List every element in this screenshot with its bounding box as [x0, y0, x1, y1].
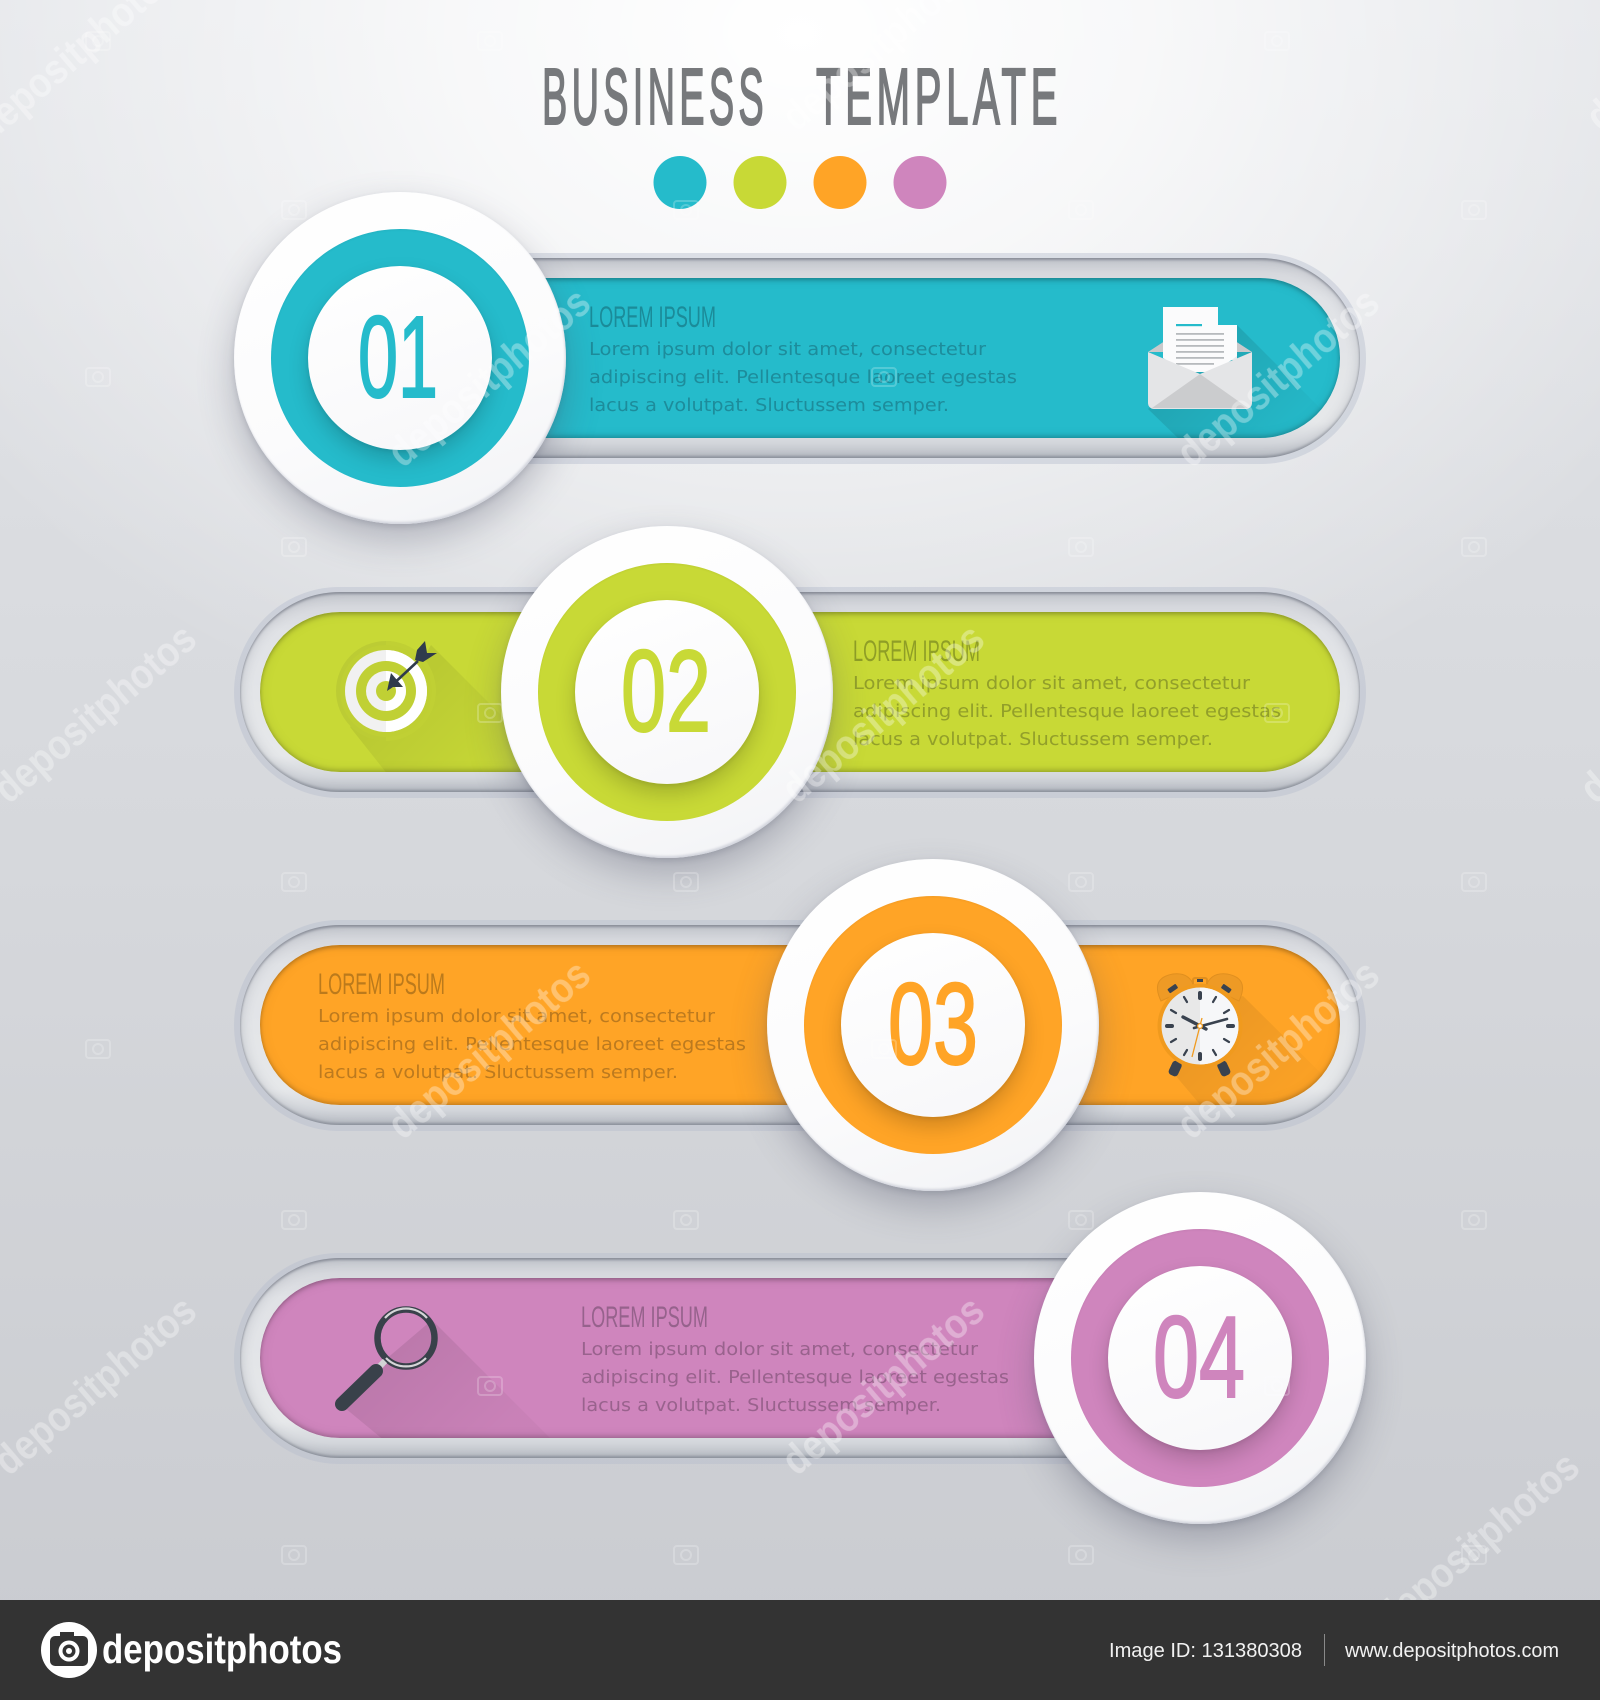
text block 03: lacus a volutpat. Sluctussem semper.: [318, 1062, 678, 1083]
text block 02: Lorem ipsum dolor sit amet, consectetur: [853, 673, 1251, 694]
text block 01: Lorem ipsum dolor sit amet, consectetur: [589, 339, 987, 360]
text block 03: LOREM IPSUM: [318, 968, 445, 1001]
watermark layer: depositphotos: [378, 278, 599, 476]
panel: step 02: [234, 524, 1366, 890]
text block 04: [581, 1301, 1009, 1416]
number 02: 02: [621, 626, 711, 756]
panel: step 04: [234, 1190, 1382, 1556]
text block 01: LOREM IPSUM: [589, 301, 716, 334]
text block 02: lacus a volutpat. Sluctussem semper.: [853, 729, 1213, 750]
groove 02: [234, 587, 1366, 798]
text block 03: [318, 968, 746, 1083]
footer logo: depositphotos: [102, 1626, 342, 1672]
groove 03: [234, 920, 1366, 1131]
footer logo: [41, 1622, 342, 1678]
watermark layer: depositphotos: [772, 1286, 993, 1484]
text block 03: Lorem ipsum dolor sit amet, consectetur: [318, 1006, 716, 1027]
coloured bar 03: [260, 945, 1340, 1105]
colour dots: [654, 156, 946, 209]
ring 02: [538, 563, 796, 821]
ring 01: [271, 229, 529, 487]
number 01: 01: [358, 292, 438, 422]
coloured bar 02: [260, 612, 1340, 772]
number 04: [1108, 1266, 1292, 1450]
text block 04: Lorem ipsum dolor sit amet, consectetur: [581, 1339, 979, 1360]
groove 01: [234, 253, 1366, 464]
number circle 03: [767, 859, 1099, 1191]
ring 04: [1071, 1229, 1329, 1487]
text block 01: [589, 301, 1017, 416]
text block 01: adipiscing elit. Pellentesque laoreet egestas: [589, 367, 1017, 388]
watermark layer: depositphotos: [378, 950, 599, 1148]
number circle 04: [1034, 1192, 1366, 1524]
watermark layer: depositphotos: [772, 614, 993, 812]
text block 02: [853, 635, 1281, 750]
number circle 02: [501, 526, 833, 858]
number circle 01: [234, 192, 566, 524]
icon: envelope: [1148, 307, 1294, 438]
text block 02: adipiscing elit. Pellentesque laoreet egestas: [853, 701, 1281, 722]
ring 03: [804, 896, 1062, 1154]
number 01: [308, 266, 492, 450]
panel: step 01: [217, 190, 1366, 557]
watermark layer: depositphotos: [1167, 278, 1388, 476]
footer image id and url: Image ID: 131380308: [1109, 1640, 1302, 1662]
icon: magnifying glass: [335, 1306, 504, 1438]
title: BUSINESS: [542, 52, 768, 141]
text block 04: lacus a volutpat. Sluctussem semper.: [581, 1395, 941, 1416]
number 04: 04: [1153, 1292, 1245, 1422]
footer image id and url: [1109, 1634, 1559, 1666]
number 03: 03: [888, 959, 978, 1089]
title: TEMPLATE: [816, 52, 1062, 141]
groove 04: [234, 1253, 1366, 1464]
icon: alarm clock: [1157, 973, 1295, 1105]
panel: step 03: [234, 857, 1366, 1223]
number 02: [575, 600, 759, 784]
text block 01: lacus a volutpat. Sluctussem semper.: [589, 395, 949, 416]
coloured bar 01: [260, 278, 1340, 438]
icon: target with arrow: [336, 641, 482, 772]
footer bar: [0, 1600, 1600, 1700]
text block 03: adipiscing elit. Pellentesque laoreet egestas: [318, 1034, 746, 1055]
text block 04: adipiscing elit. Pellentesque laoreet egestas: [581, 1367, 1009, 1388]
text block 02: LOREM IPSUM: [853, 635, 980, 668]
watermark layer: depositphotos: [1167, 950, 1388, 1148]
coloured bar 04: [260, 1278, 1340, 1438]
text block 04: LOREM IPSUM: [581, 1301, 708, 1334]
footer image id and url: www.depositphotos.com: [1344, 1640, 1559, 1662]
number 03: [841, 933, 1025, 1117]
